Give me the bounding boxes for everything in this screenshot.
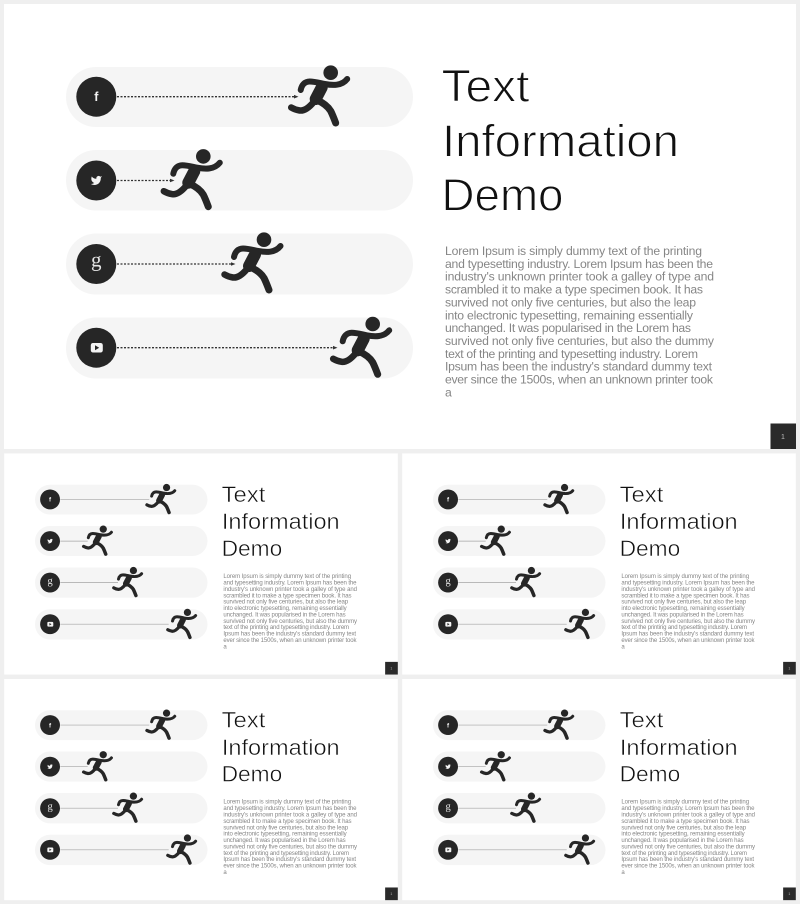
- title: Information: [620, 735, 738, 760]
- icon: runner: [482, 751, 509, 780]
- body text: scrambled it to make a type specimen book. It has: [445, 283, 703, 297]
- title: [222, 482, 340, 561]
- icon: youtube: [445, 622, 451, 627]
- page number: [385, 887, 398, 900]
- title: Text: [620, 482, 664, 507]
- body text: into electronic typesetting, remaining essentially: [223, 606, 348, 612]
- row: twitter progress: [433, 751, 605, 782]
- body text: Lorem Ipsum is simply dummy text of the printing: [621, 574, 749, 580]
- icon: runner: [291, 65, 347, 123]
- body text: a: [223, 870, 227, 876]
- body text: survived not only five centuries, but also the leap: [223, 600, 349, 606]
- body text: survived not only five centuries, but also the leap: [621, 825, 747, 831]
- row: youtube progress: [66, 317, 413, 378]
- body text: ever since the 1500s, when an unknown printer took: [621, 638, 756, 644]
- title: Demo: [442, 170, 564, 220]
- title: Text: [222, 482, 266, 507]
- body text: [621, 574, 756, 650]
- body text: unchanged. It was popularised in the Lorem has: [445, 321, 691, 335]
- page number: [783, 887, 796, 900]
- title: [442, 60, 679, 220]
- page number: [783, 662, 796, 675]
- body text: text of the printing and typesetting industry. Lorem: [223, 625, 349, 631]
- body text: into electronic typesetting, remaining essentially: [223, 832, 348, 838]
- body text: text of the printing and typesetting industry. Lorem: [223, 851, 349, 857]
- body text: scrambled it to make a type specimen book. It has: [621, 593, 750, 599]
- icon: youtube: [91, 343, 103, 352]
- icon: facebook: f: [447, 722, 450, 729]
- icon: runner: [482, 526, 509, 554]
- row: youtube progress: [35, 834, 207, 865]
- body text: Lorem Ipsum is simply dummy text of the printing: [223, 574, 351, 580]
- icon: runner: [545, 484, 573, 513]
- row: twitter progress: [35, 751, 207, 782]
- row: facebook progress: [433, 484, 605, 515]
- icon: runner: [168, 834, 196, 863]
- body text: scrambled it to make a type specimen book. It has: [223, 593, 352, 599]
- body text: survived not only five centuries, but also the leap: [223, 825, 349, 831]
- icon: google: g: [47, 802, 53, 813]
- body text: a: [223, 644, 227, 650]
- row: youtube progress: [433, 609, 605, 640]
- title: Text: [222, 707, 266, 732]
- icon: facebook: f: [49, 722, 52, 729]
- page number: 1: [390, 667, 392, 671]
- body text: Ipsum has been the industry's standard dummy text: [621, 632, 754, 638]
- body text: text of the printing and typesetting industry. Lorem: [621, 625, 747, 631]
- icon: twitter: [445, 764, 451, 769]
- icon: runner: [84, 751, 111, 780]
- body text: and typesetting industry. Lorem Ipsum has been the: [621, 806, 755, 812]
- title: Demo: [222, 762, 282, 787]
- icon: facebook: f: [94, 90, 99, 104]
- body text: survived not only five centuries, but also the dummy: [621, 844, 756, 850]
- panel: small slide bottom right: [402, 679, 796, 900]
- body text: unchanged. It was popularised in the Lorem has: [621, 612, 744, 618]
- title: Information: [222, 509, 340, 534]
- body text: scrambled it to make a type specimen book. It has: [223, 819, 352, 825]
- icon: runner: [164, 149, 220, 207]
- title: Demo: [620, 762, 680, 787]
- row: facebook progress: [35, 710, 207, 740]
- title: Information: [442, 116, 679, 166]
- body text: survived not only five centuries, but also the leap: [445, 295, 696, 309]
- body text: text of the printing and typesetting industry. Lorem: [621, 851, 747, 857]
- body text: scrambled it to make a type specimen book. It has: [621, 819, 750, 825]
- body text: a: [621, 870, 625, 876]
- icon: youtube: [47, 622, 53, 627]
- icon: runner: [147, 484, 175, 513]
- page number: 1: [781, 434, 785, 441]
- panel: small slide top left: [4, 453, 398, 675]
- icon: google: g: [445, 802, 451, 813]
- icon: twitter: [47, 764, 53, 769]
- body text: ever since the 1500s, when an unknown printer took: [223, 864, 358, 870]
- page number: 1: [390, 892, 392, 896]
- body text: unchanged. It was popularised in the Lorem has: [223, 612, 346, 618]
- icon: runner: [333, 317, 389, 374]
- title: [620, 482, 738, 561]
- icon: twitter: [445, 539, 451, 543]
- body text: [223, 574, 358, 650]
- row: twitter progress: [433, 526, 605, 556]
- icon: runner: [224, 232, 280, 290]
- icon: runner: [147, 710, 175, 738]
- body text: industry's unknown printer took a galley of type and: [621, 813, 755, 819]
- title: Information: [620, 509, 738, 534]
- row: google progress: [66, 232, 413, 294]
- body text: industry's unknown printer took a galley of type and: [223, 587, 357, 593]
- row: youtube progress: [433, 834, 605, 865]
- row: youtube progress: [35, 609, 207, 640]
- body text: and typesetting industry. Lorem Ipsum has been the: [223, 581, 357, 587]
- body text: a: [445, 385, 452, 399]
- title: Information: [222, 735, 340, 760]
- row: facebook progress: [66, 65, 413, 127]
- icon: runner: [114, 567, 142, 596]
- body text: ever since the 1500s, when an unknown printer took: [621, 864, 756, 870]
- body text: industry's unknown printer took a galley of type and: [223, 813, 357, 819]
- body text: industry's unknown printer took a galley of type and: [445, 270, 714, 284]
- body text: Lorem Ipsum is simply dummy text of the printing: [223, 800, 351, 806]
- body text: into electronic typesetting, remaining essentially: [621, 832, 746, 838]
- panel: small slide top right: [402, 453, 796, 675]
- row: google progress: [35, 567, 207, 598]
- icon: runner: [168, 609, 196, 637]
- page number: 1: [788, 892, 790, 896]
- row: twitter progress: [66, 149, 413, 210]
- body text: survived not only five centuries, but also the dummy: [223, 619, 358, 625]
- body text: into electronic typesetting, remaining essentially: [445, 308, 694, 322]
- body text: Ipsum has been the industry's standard dummy text: [223, 857, 356, 863]
- row: twitter progress: [35, 526, 207, 556]
- body text: and typesetting industry. Lorem Ipsum has been the: [223, 806, 357, 812]
- body text: Lorem Ipsum is simply dummy text of the printing: [621, 800, 749, 806]
- title: [620, 707, 738, 787]
- body text: Ipsum has been the industry's standard dummy text: [621, 857, 754, 863]
- page number: [385, 662, 398, 675]
- icon: runner: [114, 793, 142, 821]
- body text: ever since the 1500s, when an unknown printer took: [445, 372, 714, 386]
- icon: youtube: [47, 847, 53, 852]
- icon: runner: [512, 567, 540, 596]
- icon: twitter: [47, 539, 53, 543]
- row: google progress: [35, 793, 207, 823]
- body text: Lorem Ipsum is simply dummy text of the printing: [445, 244, 702, 258]
- body text: [445, 244, 715, 399]
- icon: youtube: [445, 847, 451, 852]
- row: facebook progress: [35, 484, 207, 515]
- icon: runner: [512, 793, 540, 821]
- page number: 1: [788, 667, 790, 671]
- icon: runner: [84, 526, 111, 554]
- row: google progress: [433, 793, 605, 823]
- icon: google: g: [47, 576, 53, 587]
- title: [222, 707, 340, 787]
- body text: unchanged. It was popularised in the Lorem has: [223, 838, 346, 844]
- title: Demo: [620, 536, 680, 561]
- icon: google: g: [91, 248, 102, 272]
- icon: twitter: [91, 176, 102, 185]
- title: Text: [442, 60, 530, 112]
- page number: [770, 424, 796, 449]
- body text: and typesetting industry. Lorem Ipsum has been the: [445, 257, 713, 271]
- icon: runner: [566, 609, 594, 637]
- icon: facebook: f: [447, 497, 450, 504]
- icon: runner: [545, 710, 573, 738]
- body text: a: [621, 644, 625, 650]
- body text: ever since the 1500s, when an unknown printer took: [223, 638, 358, 644]
- body text: survived not only five centuries, but also the leap: [621, 600, 747, 606]
- body text: and typesetting industry. Lorem Ipsum has been the: [621, 581, 755, 587]
- body text: Ipsum has been the industry's standard dummy text: [445, 360, 713, 374]
- icon: facebook: f: [49, 497, 52, 504]
- body text: unchanged. It was popularised in the Lorem has: [621, 838, 744, 844]
- body text: into electronic typesetting, remaining essentially: [621, 606, 746, 612]
- title: Demo: [222, 536, 282, 561]
- body text: text of the printing and typesetting industry. Lorem: [445, 347, 698, 361]
- panel: main slide: [4, 4, 796, 449]
- icon: google: g: [445, 576, 451, 587]
- body text: [223, 800, 358, 876]
- body text: survived not only five centuries, but also the dummy: [223, 844, 358, 850]
- body text: industry's unknown printer took a galley of type and: [621, 587, 755, 593]
- body text: survived not only five centuries, but also the dummy: [621, 619, 756, 625]
- icon: runner: [566, 834, 594, 863]
- body text: [621, 800, 756, 876]
- body text: survived not only five centuries, but also the dummy: [445, 334, 715, 348]
- row: facebook progress: [433, 710, 605, 740]
- panel: small slide bottom left: [4, 679, 398, 900]
- row: google progress: [433, 567, 605, 598]
- title: Text: [620, 707, 664, 732]
- body text: Ipsum has been the industry's standard dummy text: [223, 632, 356, 638]
